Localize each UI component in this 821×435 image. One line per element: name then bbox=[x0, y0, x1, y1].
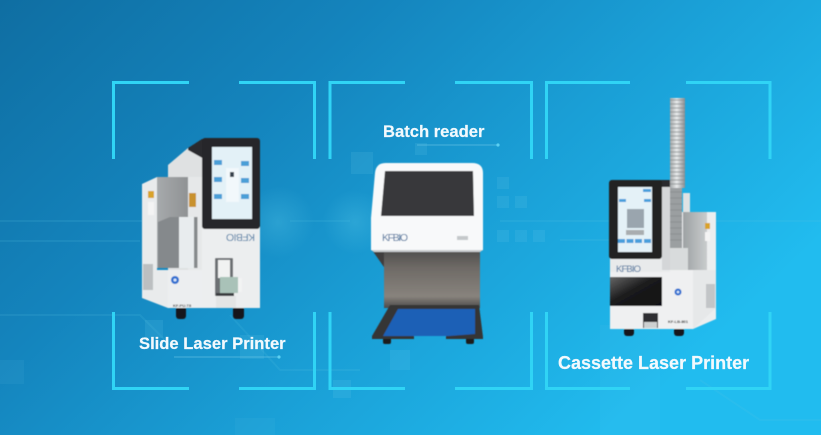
logo: KFBIO bbox=[226, 231, 255, 243]
screen bbox=[212, 147, 252, 219]
base bbox=[168, 270, 202, 308]
warning labels bbox=[148, 191, 154, 198]
panel: slide laser printer frame bbox=[114, 82, 314, 388]
feet bbox=[624, 327, 634, 336]
black top bbox=[188, 139, 206, 160]
upper body bbox=[168, 148, 202, 270]
left side panel bbox=[142, 177, 168, 308]
small text bbox=[457, 236, 468, 240]
rear tower bbox=[662, 212, 716, 329]
underline: slide laser printer bbox=[174, 355, 281, 359]
device: slide laser printer bbox=[142, 138, 260, 319]
screen bbox=[381, 171, 474, 216]
power button bbox=[674, 288, 682, 296]
screen bbox=[618, 187, 652, 252]
cassette slot bbox=[643, 313, 658, 328]
rear extension bbox=[683, 193, 690, 213]
on-screen grid bbox=[627, 209, 644, 228]
grey bay bbox=[157, 177, 188, 268]
screen bezel bbox=[609, 180, 662, 259]
lower right body bbox=[202, 225, 260, 308]
black top bbox=[655, 180, 670, 187]
heading: slide laser printer: Slide Laser Printer bbox=[139, 334, 286, 353]
on-screen buttons bbox=[214, 160, 249, 199]
vent bbox=[143, 264, 153, 290]
base bbox=[372, 305, 483, 339]
stack ribs bbox=[670, 100, 685, 240]
feet bbox=[383, 336, 391, 344]
device: cassette laser printer bbox=[609, 98, 716, 336]
cylinder bbox=[670, 248, 688, 270]
feet bbox=[176, 306, 186, 319]
device: batch reader bbox=[371, 163, 483, 344]
stack column bbox=[670, 98, 685, 188]
panel: cassette laser printer frame bbox=[546, 82, 770, 388]
vent bbox=[706, 284, 715, 308]
stand bbox=[372, 250, 386, 306]
tray bbox=[383, 309, 475, 336]
panel: batch reader frame bbox=[330, 82, 532, 388]
model label: KF-LB-801 bbox=[668, 319, 689, 324]
slide column bbox=[179, 217, 194, 268]
power button bbox=[171, 276, 179, 284]
front body bbox=[610, 270, 693, 329]
underline: batch reader bbox=[417, 143, 500, 147]
on-screen slide bbox=[226, 168, 239, 202]
black window bbox=[610, 277, 662, 306]
white head bbox=[371, 163, 483, 250]
heading: cassette laser printer: Cassette Laser Printer bbox=[558, 353, 749, 373]
heading: batch reader: Batch reader bbox=[383, 122, 485, 141]
logo: KFBIO bbox=[616, 264, 641, 275]
logo: KFBIO bbox=[382, 232, 408, 244]
warning label bbox=[705, 223, 710, 229]
model label: KF-PU-T8 bbox=[173, 303, 192, 308]
slide slot bbox=[215, 258, 233, 296]
screen bezel bbox=[202, 138, 260, 229]
on-screen buttons bbox=[618, 189, 651, 243]
